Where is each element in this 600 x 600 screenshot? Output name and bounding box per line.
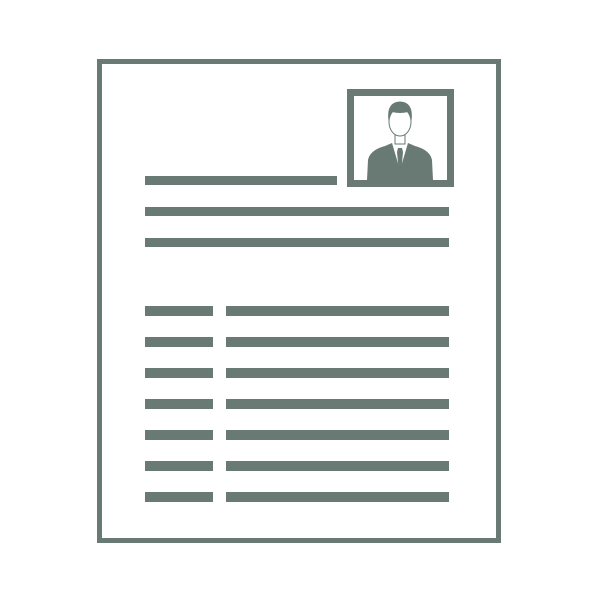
icon: person	[367, 102, 433, 180]
detail rows	[145, 306, 449, 502]
photo frame with person	[350, 92, 450, 184]
document outline	[100, 62, 498, 540]
header lines	[145, 176, 449, 247]
